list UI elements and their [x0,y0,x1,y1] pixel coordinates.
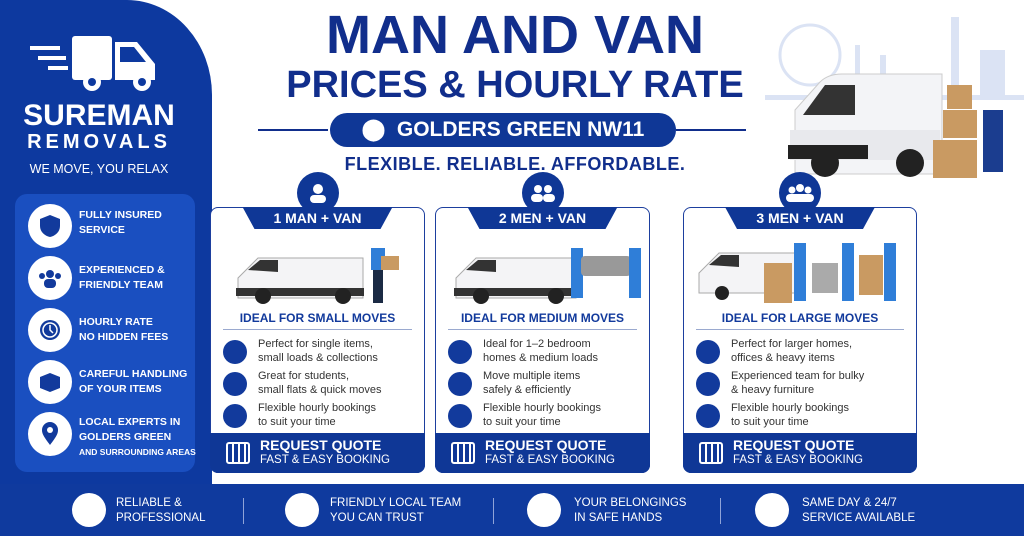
item: same day [755,493,915,527]
card 2: 2 MEN + VAN [499,210,586,226]
card 1: 1 MAN + VAN [273,210,362,226]
card 1: REQUEST QUOTE [260,437,381,453]
card 1: IDEAL FOR SMALL MOVES [240,311,395,325]
card 1 [210,207,425,473]
item: reliable [72,493,206,527]
feature list: OF YOUR ITEMS [79,383,162,395]
hero van [788,74,1003,178]
feature: insured [28,204,162,248]
feature list: NO HIDDEN FEES [79,331,168,343]
feature list: HOURLY RATE [79,316,153,328]
card 3: IDEAL FOR LARGE MOVES [722,311,878,325]
card 2 [435,207,650,473]
card 2: safely & efficiently [483,384,571,396]
card 3: Perfect for larger homes, [731,338,852,350]
bottom bar: YOUR BELONGINGS [574,497,686,509]
feature list: GOLDERS GREEN [79,431,171,443]
card 2: homes & medium loads [483,352,598,364]
card 3: 3 MEN + VAN [756,210,844,226]
sidebar [0,0,212,484]
feature list: LOCAL EXPERTS IN [79,416,180,428]
feature list: CAREFUL HANDLING [79,368,187,380]
bottom bar: IN SAFE HANDS [574,512,662,524]
sidebar: REMOVALS [27,131,171,153]
card 3: & heavy furniture [731,384,814,396]
brand name: SUREMAN [23,99,175,132]
feature: local [28,412,196,457]
card 2: Flexible hourly bookings [483,402,601,414]
card 3: FAST & EASY BOOKING [733,454,863,466]
item: safe [527,493,686,527]
feature: team [28,256,165,300]
card 1: FAST & EASY BOOKING [260,454,390,466]
feature list: FULLY INSURED [79,209,162,221]
title: MAN AND VAN [326,5,704,65]
card 2: REQUEST QUOTE [485,437,606,453]
bottom bar [0,484,1024,536]
card 3: Flexible hourly bookings [731,402,849,414]
bottom bar: RELIABLE & [116,497,182,509]
card 3: offices & heavy items [731,352,835,364]
feature: handling [28,360,187,404]
card 2: Ideal for 1–2 bedroom [483,338,591,350]
card 1: Great for students, [258,370,349,382]
feature list: FRIENDLY TEAM [79,279,163,291]
card 1: Flexible hourly bookings [258,402,376,414]
card 2: to suit your time [483,416,561,428]
card 3 [683,207,917,473]
feature list: SERVICE [79,224,125,236]
feature list [15,194,195,472]
bottom bar: SAME DAY & 24/7 [802,497,897,509]
card 1: Perfect for single items, [258,338,373,350]
location pill: ⬤ GOLDERS GREEN NW11 [362,118,644,141]
logo van icon [30,36,155,91]
subtitle: PRICES & HOURLY RATE [286,64,744,106]
card 3: to suit your time [731,416,809,428]
bottom bar: FRIENDLY LOCAL TEAM [330,497,461,509]
card 2: IDEAL FOR MEDIUM MOVES [461,311,624,325]
card 3: Experienced team for bulky [731,370,864,382]
bottom bar: YOU CAN TRUST [330,512,424,524]
item: friendly [285,493,461,527]
card 2: Move multiple items [483,370,580,382]
skyline [765,17,1024,100]
bottom bar: SERVICE AVAILABLE [802,512,915,524]
card 3: REQUEST QUOTE [733,437,854,453]
feature list: AND SURROUNDING AREAS [79,447,196,457]
card 1: to suit your time [258,416,336,428]
feature: hourly [28,308,168,352]
bottom bar: PROFESSIONAL [116,512,205,524]
feature list: EXPERIENCED & [79,264,165,276]
tagline: WE MOVE, YOU RELAX [30,162,168,176]
card 1: small loads & collections [258,352,378,364]
tagline: FLEXIBLE. RELIABLE. AFFORDABLE. [345,154,685,174]
card 2: FAST & EASY BOOKING [485,454,615,466]
card 1: small flats & quick moves [258,384,381,396]
